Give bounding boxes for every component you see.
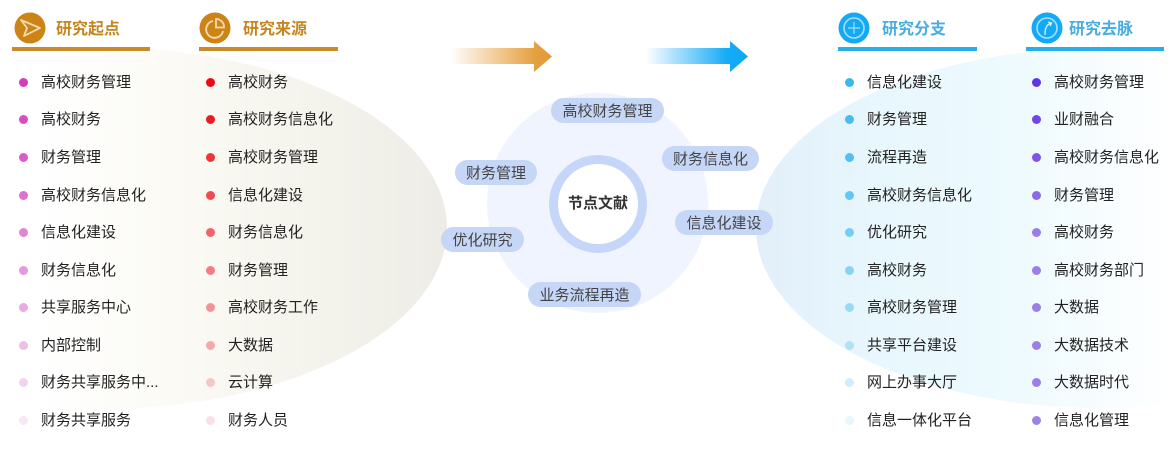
list item: 信息一体化平台 (867, 412, 972, 429)
list item: 信息化建设 (41, 224, 116, 241)
list item: 大数据技术 (1054, 337, 1129, 354)
pill: 优化研究 (452, 232, 512, 249)
list item: 优化研究 (867, 224, 927, 241)
list item: 高校财务部门 (1054, 262, 1144, 279)
pill (662, 146, 759, 171)
list item: 内部控制 (41, 337, 101, 354)
list item: 高校财务 (1054, 224, 1114, 241)
center node (549, 155, 647, 253)
list item: 高校财务 (228, 74, 288, 91)
list item: 财务管理 (228, 262, 288, 279)
list item: 高校财务信息化 (1054, 149, 1159, 166)
list item: 信息化建设 (867, 74, 942, 91)
pill (441, 227, 524, 252)
list item: 财务共享服务 (41, 412, 131, 429)
list item: 云计算 (228, 374, 273, 391)
pill (675, 210, 773, 235)
list item: 高校财务 (867, 262, 927, 279)
list item: 高校财务 (41, 111, 101, 128)
list item: 财务管理 (1054, 187, 1114, 204)
list item: 流程再造 (867, 149, 927, 166)
icon: pie chart (200, 12, 230, 44)
list item: 高校财务信息化 (867, 187, 972, 204)
list item: 大数据 (1054, 299, 1099, 316)
list item (206, 374, 273, 391)
icon: rotate circle (1032, 12, 1062, 44)
list item: 财务人员 (228, 412, 288, 429)
list item (1032, 258, 1144, 282)
pill: 财务管理 (466, 165, 526, 182)
heading: 研究来源 (243, 21, 307, 38)
panel: 节点文献 center diagram (441, 93, 773, 313)
list item: 高校财务管理 (41, 74, 131, 91)
outer circle (487, 93, 708, 313)
list item (1032, 220, 1114, 244)
list item: 高校财务信息化 (41, 187, 146, 204)
list item: 业财融合 (1054, 111, 1114, 128)
arrow: orange (454, 41, 552, 72)
heading: 研究去脉 (1069, 21, 1133, 38)
list item: 共享平台建设 (867, 337, 957, 354)
list item: 财务共享服务中... (41, 374, 159, 391)
pill: 业务流程再造 (539, 287, 630, 304)
list item (1032, 295, 1099, 319)
center node: 节点文献 (568, 195, 628, 212)
list item: 高校财务管理 (867, 299, 957, 316)
list item: 财务管理 (867, 111, 927, 128)
pill: 信息化建设 (686, 215, 762, 232)
list item: 财务信息化 (41, 262, 116, 279)
pill (455, 160, 537, 185)
pill (528, 282, 641, 307)
list item (1032, 183, 1114, 207)
list item: 财务信息化 (228, 224, 303, 241)
list item: 高校财务工作 (228, 299, 318, 316)
list item: 网上办事大厅 (867, 374, 957, 391)
icon: plus circle (838, 12, 870, 44)
heading: 研究起点 (56, 21, 120, 38)
arrow: blue (649, 41, 748, 72)
icon: send arrow (14, 12, 46, 44)
pill (551, 98, 664, 123)
pill: 财务信息化 (673, 151, 748, 168)
list item (206, 337, 273, 354)
list item: 共享服务中心 (41, 299, 131, 316)
list item (1032, 408, 1129, 432)
list item: 高校财务管理 (228, 149, 318, 166)
list item: 高校财务信息化 (228, 111, 333, 128)
list item: 大数据 (228, 337, 273, 354)
list item (1032, 333, 1129, 357)
list item: 信息化建设 (228, 187, 303, 204)
list item (1032, 370, 1129, 394)
list item: 信息化管理 (1054, 412, 1129, 429)
list item: 高校财务管理 (1054, 74, 1144, 91)
heading: 研究分支 (882, 21, 946, 38)
list item: 财务管理 (41, 149, 101, 166)
list item: 大数据时代 (1054, 374, 1129, 391)
pill: 高校财务管理 (562, 103, 652, 120)
